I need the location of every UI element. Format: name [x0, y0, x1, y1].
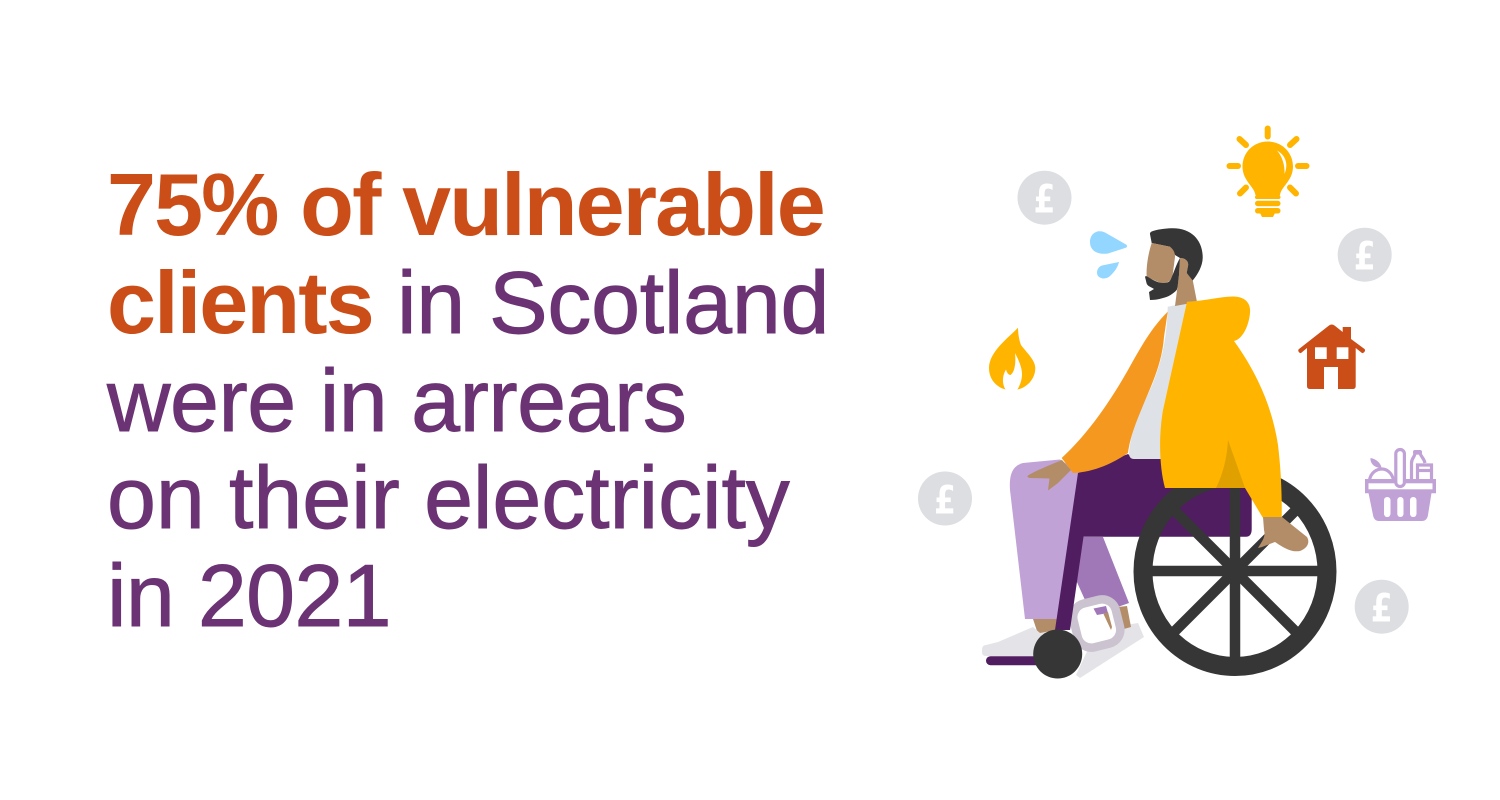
icon: house [1298, 324, 1365, 389]
icon: pound coin left: £ [934, 478, 956, 523]
icon: pound coin left [918, 472, 972, 526]
icon: pound coin bottom right [1355, 580, 1409, 634]
title: headline statistic: on their electricity [107, 448, 790, 547]
far leg [1054, 505, 1129, 615]
far ankle inside ring [1104, 612, 1112, 630]
figure: yellow hoodie [1160, 296, 1282, 518]
title: headline statistic: clients in Scotland [107, 253, 829, 352]
title: headline statistic: were in arrears [107, 351, 686, 450]
face [1147, 243, 1175, 284]
hoodie fold shadow [1216, 440, 1245, 488]
icon: pound coin top right [1338, 228, 1392, 282]
right ankle [1113, 606, 1131, 632]
icon: shopping basket [1365, 450, 1436, 521]
figure: orange sleeve [1062, 312, 1168, 473]
right shoe [1076, 623, 1144, 678]
icon: gas flame [989, 328, 1035, 390]
icon: pound coin top left: £ [1034, 177, 1055, 222]
beard [1145, 258, 1180, 300]
near leg [1010, 460, 1080, 619]
title: headline statistic: in 2021 [107, 546, 391, 645]
title: headline statistic [106, 155, 829, 645]
left ankle [1033, 619, 1058, 640]
icon: pound coin bottom right: £ [1371, 586, 1393, 631]
icon: pound coin top left [1018, 171, 1072, 225]
icon: pound coin top right: £ [1354, 234, 1376, 279]
icon: light bulb [1230, 128, 1306, 217]
left shoe [982, 627, 1056, 656]
figure: white shirt [1129, 303, 1187, 459]
far leg cuff inside ring [1094, 606, 1108, 615]
figure: front caster wheel [1033, 630, 1082, 678]
figure: large wheel [1143, 476, 1327, 666]
figure: neck and ear [1175, 258, 1197, 306]
figure: person's legs and shoes [982, 460, 1144, 678]
icon: water drops [1090, 231, 1127, 278]
title: headline statistic: 75% of vulnerable [107, 155, 824, 254]
figure: left hand [1027, 460, 1071, 490]
hair [1150, 228, 1203, 280]
figure: head and beard [1145, 228, 1203, 300]
footrest ring [1070, 596, 1123, 651]
figure: right hand [1258, 517, 1308, 551]
figure: wheelchair seat and frame [990, 454, 1252, 661]
